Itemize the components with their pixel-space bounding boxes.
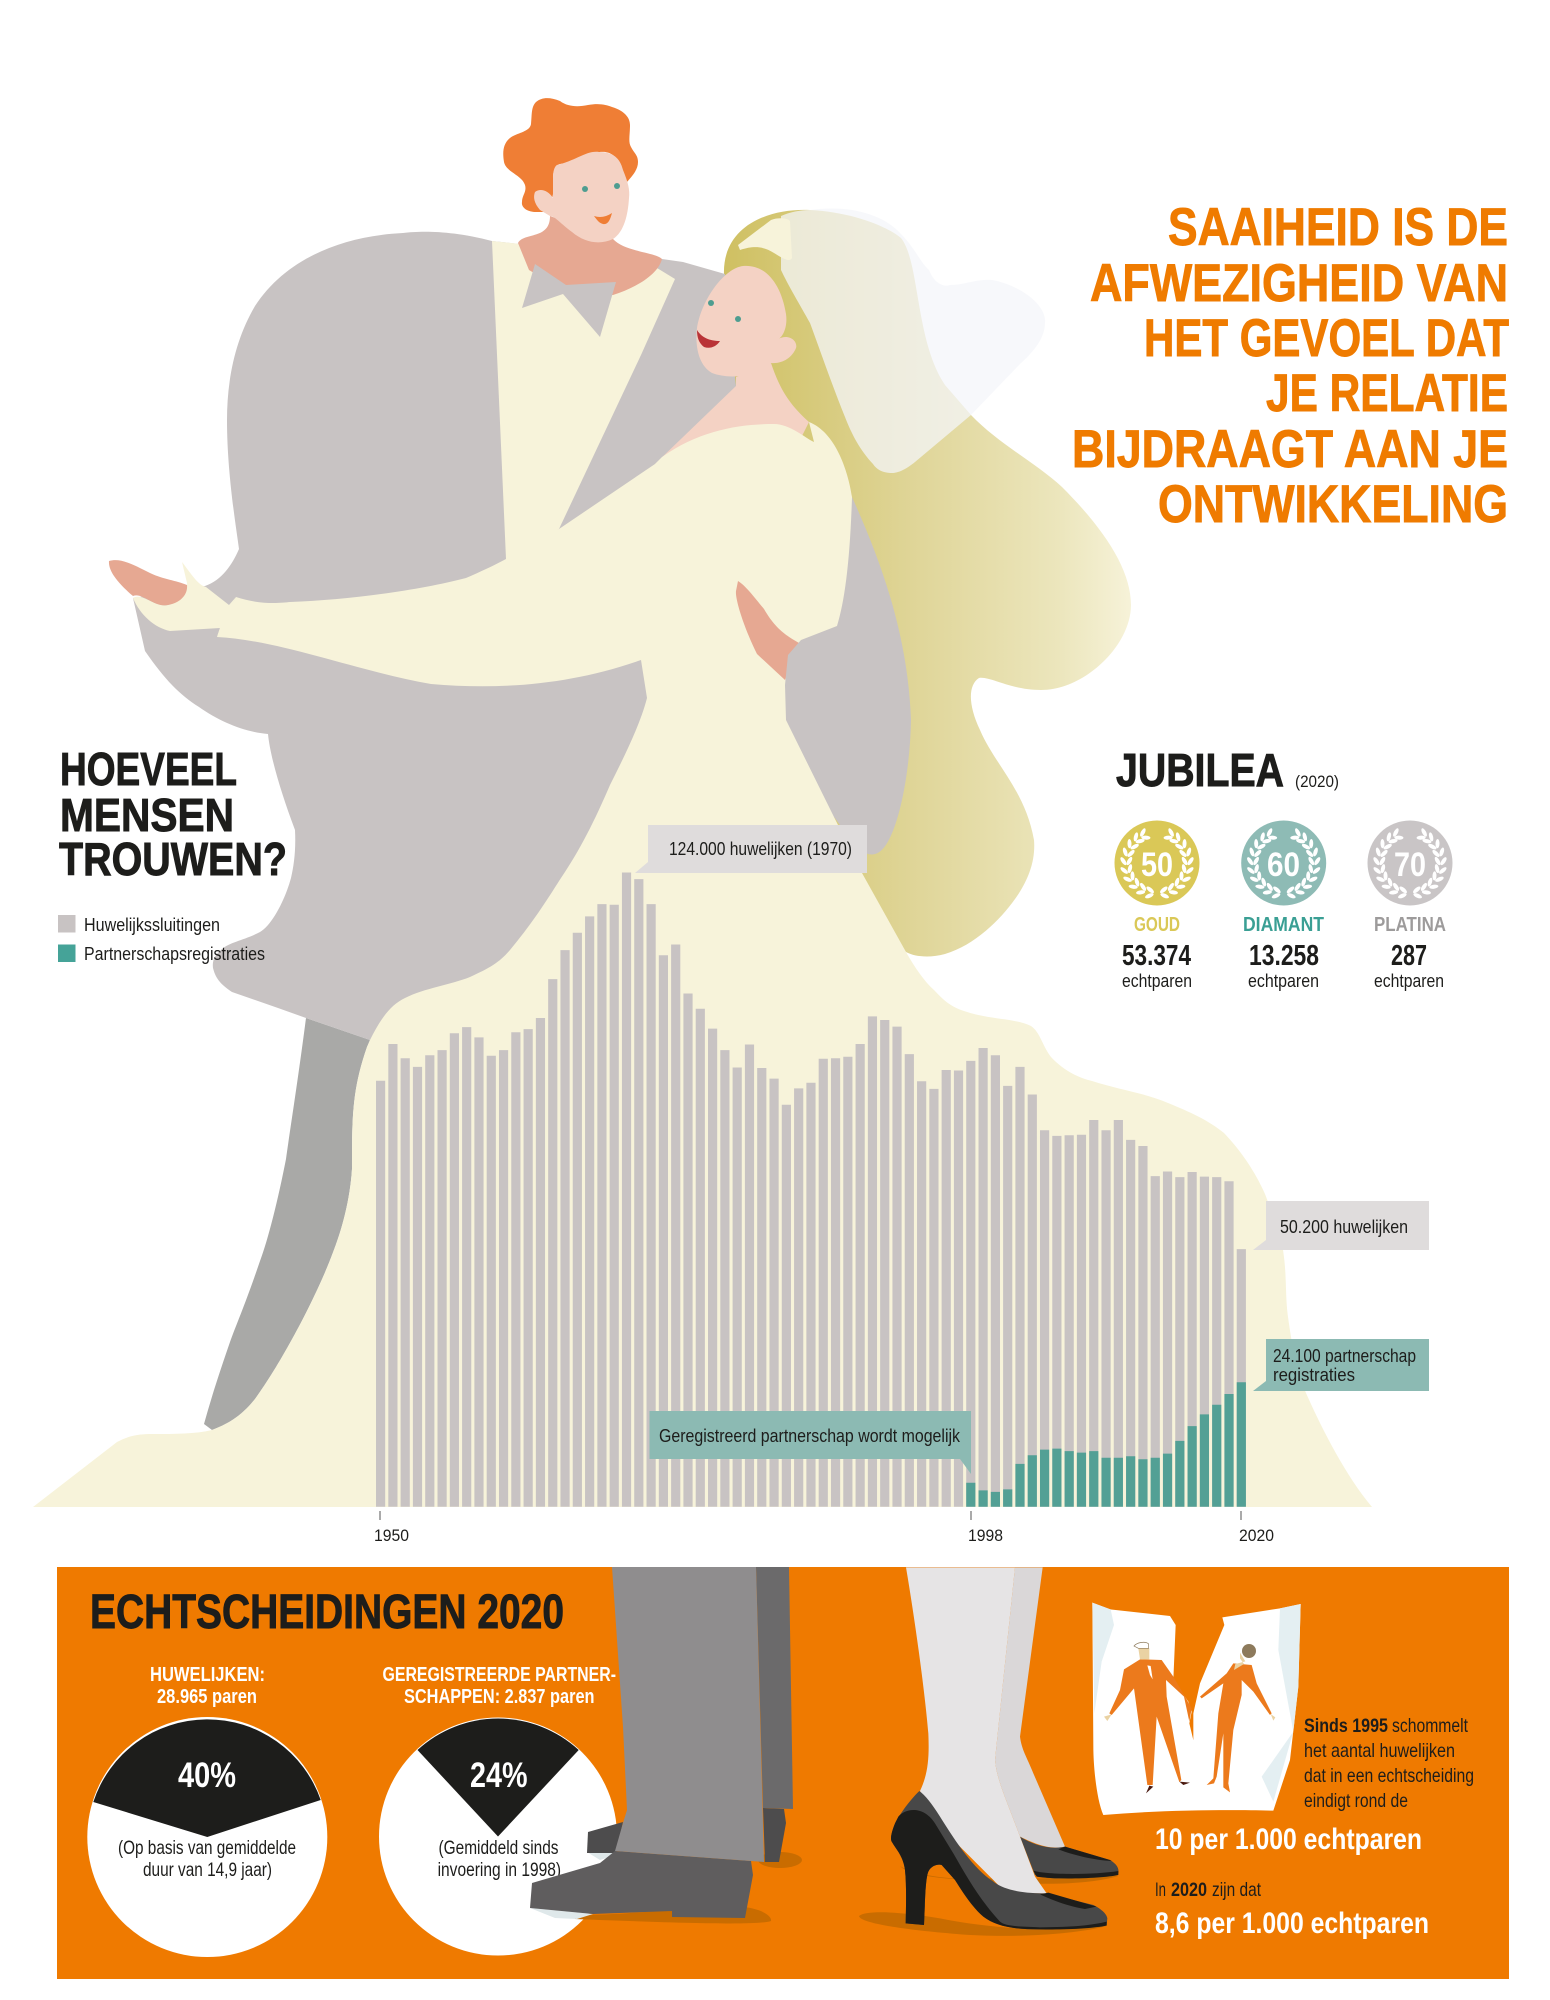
text: sinds 1995: schommelt [1392, 1715, 1468, 1737]
bridal veil [781, 208, 1045, 473]
pie: geregistreerde partnerschappen: invoering in 1998) [438, 1859, 561, 1881]
text: sinds 1995 [1304, 1715, 1474, 1812]
divorced man figure [1104, 1642, 1192, 1793]
divorced woman figure [1200, 1644, 1275, 1792]
callout: 24.100 partnerschap registraties [1253, 1339, 1429, 1391]
heading: hoeveel mensen trouwen [59, 743, 287, 885]
front leg [906, 1567, 1047, 1893]
text: in 2020 [1155, 1879, 1261, 1901]
jubilee: goud: echtparen [1122, 970, 1192, 991]
jubilee: platina: 287 [1391, 940, 1427, 972]
groom eyes and mouth [582, 183, 620, 224]
stat: 10 per 1.000: 10 per 1.000 echtparen [1155, 1823, 1422, 1856]
main title [1072, 198, 1509, 534]
jubilee: diamant [1241, 820, 1326, 991]
groom face [534, 152, 629, 242]
jubilee: diamant: 13.258 [1249, 940, 1319, 972]
x axis: 1998 [968, 1526, 1003, 1545]
text: in 2020: In [1155, 1879, 1166, 1901]
back leg [995, 1567, 1065, 1848]
heading: hoeveel mensen trouwen: MENSEN [60, 789, 234, 841]
front shoe [891, 1791, 1107, 1929]
heading: hoeveel mensen trouwen: TROUWEN? [59, 833, 287, 885]
photo paper [1092, 1603, 1301, 1815]
groom jacket [133, 232, 736, 1040]
pie: huwelijken: HUWELIJKEN: [150, 1664, 265, 1686]
callout: 24.100 partnerschap registraties: registraties [1273, 1364, 1355, 1385]
jubilee: goud: GOUD [1134, 914, 1180, 936]
callout: 50.200 huwelijken [1253, 1201, 1429, 1250]
pie: huwelijken: 28.965 paren [157, 1686, 257, 1708]
groom forearm behind bride [736, 581, 799, 680]
gray bars: huwelijkssluitingen [376, 873, 1246, 1507]
text: in 2020: 2020 [1171, 1879, 1207, 1901]
groom legs and shoes [530, 1567, 802, 1923]
torn wedding photo [1092, 1603, 1301, 1815]
callout: 50.200 huwelijken: 50.200 huwelijken [1280, 1216, 1408, 1237]
heading: hoeveel mensen trouwen: HOEVEEL [60, 743, 237, 795]
panel background [57, 1567, 1509, 1979]
x axis: 2020 [1239, 1526, 1274, 1545]
bride legs and shoes [859, 1567, 1119, 1936]
back shoe toe and sole [1033, 1847, 1118, 1878]
panel: echtscheidingen [57, 1567, 1509, 1979]
heading: echtscheidingen 2020: ECHTSCHEIDINGEN 2020 [90, 1586, 564, 1639]
pie: geregistreerde partnerschappen: (Gemiddeld sinds [438, 1837, 559, 1859]
pie: huwelijken [87, 1664, 327, 1957]
jubilee: diamant: echtparen [1248, 970, 1319, 991]
text: sinds 1995: dat in een echtscheiding [1304, 1765, 1474, 1787]
pie: huwelijken: (Op basis van gemiddelde [118, 1837, 296, 1859]
jubilee: diamant: DIAMANT [1243, 914, 1324, 936]
shoe shadows [859, 1866, 1118, 1936]
jubilee: platina: 70 [1394, 846, 1426, 884]
bride dress [33, 422, 1372, 1507]
front shoe toe [1040, 1893, 1097, 1909]
heading: jubilea: (2020) [1295, 772, 1339, 791]
jubilee: platina: echtparen [1374, 970, 1444, 991]
callout: 24.100 partnerschap registraties: 24.100 partnerschap [1273, 1345, 1416, 1366]
stat: 8,6 per 1.000: 8,6 per 1.000 echtparen [1155, 1907, 1429, 1940]
jubilee: goud: 50 [1141, 846, 1173, 884]
bow tie [522, 264, 616, 337]
teal bars: partnerschapsregistraties [966, 1382, 1246, 1507]
jubilee: goud [1114, 820, 1200, 991]
callout: 124.000 huwelijken [635, 825, 867, 873]
groom hand [109, 560, 187, 605]
illustration: bridal couple [33, 98, 1372, 1507]
text: sinds 1995: het aantal huwelijken [1304, 1740, 1455, 1762]
text: in 2020: zijn dat [1212, 1879, 1261, 1901]
text: sinds 1995: eindigt rond de [1304, 1790, 1408, 1812]
bride outstretched glove [133, 562, 236, 637]
legend [58, 915, 265, 964]
jubilee: diamant: 60 [1267, 846, 1300, 884]
paper creases [1092, 1603, 1301, 1802]
pie: geregistreerde partnerschappen: GEREGISTREERDE PARTNER- [382, 1664, 616, 1686]
x axis: 1950 [374, 1526, 409, 1545]
pie: geregistreerde partnerschappen: SCHAPPEN: 2.837 paren [404, 1686, 594, 1708]
bride head [696, 266, 796, 376]
pie: geregistreerde partnerschappen [379, 1664, 617, 1956]
bride hair [724, 210, 1131, 956]
callout: 124.000 huwelijken: 124.000 huwelijken (1970) [669, 838, 852, 859]
pie: huwelijken: 40% [178, 1756, 236, 1795]
jubilee: platina [1368, 820, 1452, 991]
pie: huwelijken: duur van 14,9 jaar) [143, 1859, 272, 1881]
x axis [374, 1511, 1274, 1545]
text: sinds 1995: Sinds 1995 [1304, 1715, 1388, 1737]
bride neck [655, 363, 809, 470]
groom neck [518, 216, 662, 295]
groom hair [503, 98, 638, 212]
groom shirt [492, 241, 675, 560]
pie: geregistreerde partnerschappen: 24% [470, 1756, 528, 1795]
groom right sleeve [785, 497, 911, 854]
heading: jubilea: JUBILEA [1116, 744, 1284, 796]
bride eyes and mouth [697, 300, 741, 348]
callout: geregistreerd partnerschap [650, 1411, 971, 1474]
bar chart: huwelijken en partnerschappen 1950-2020 [376, 873, 1246, 1507]
back shoe [1020, 1837, 1119, 1878]
callout: geregistreerd partnerschap: Geregistreerd partnerschap wordt mogelijk [659, 1425, 961, 1446]
legend: Partnerschapsregistraties [84, 944, 265, 964]
veil headpiece [738, 218, 792, 260]
legend: Huwelijkssluitingen [84, 915, 220, 935]
jubilee: goud: 53.374 [1122, 940, 1191, 972]
front shoe heel and sole [891, 1810, 1107, 1929]
jubilee: platina: PLATINA [1374, 914, 1446, 936]
groom trouser back leg [204, 1018, 370, 1430]
